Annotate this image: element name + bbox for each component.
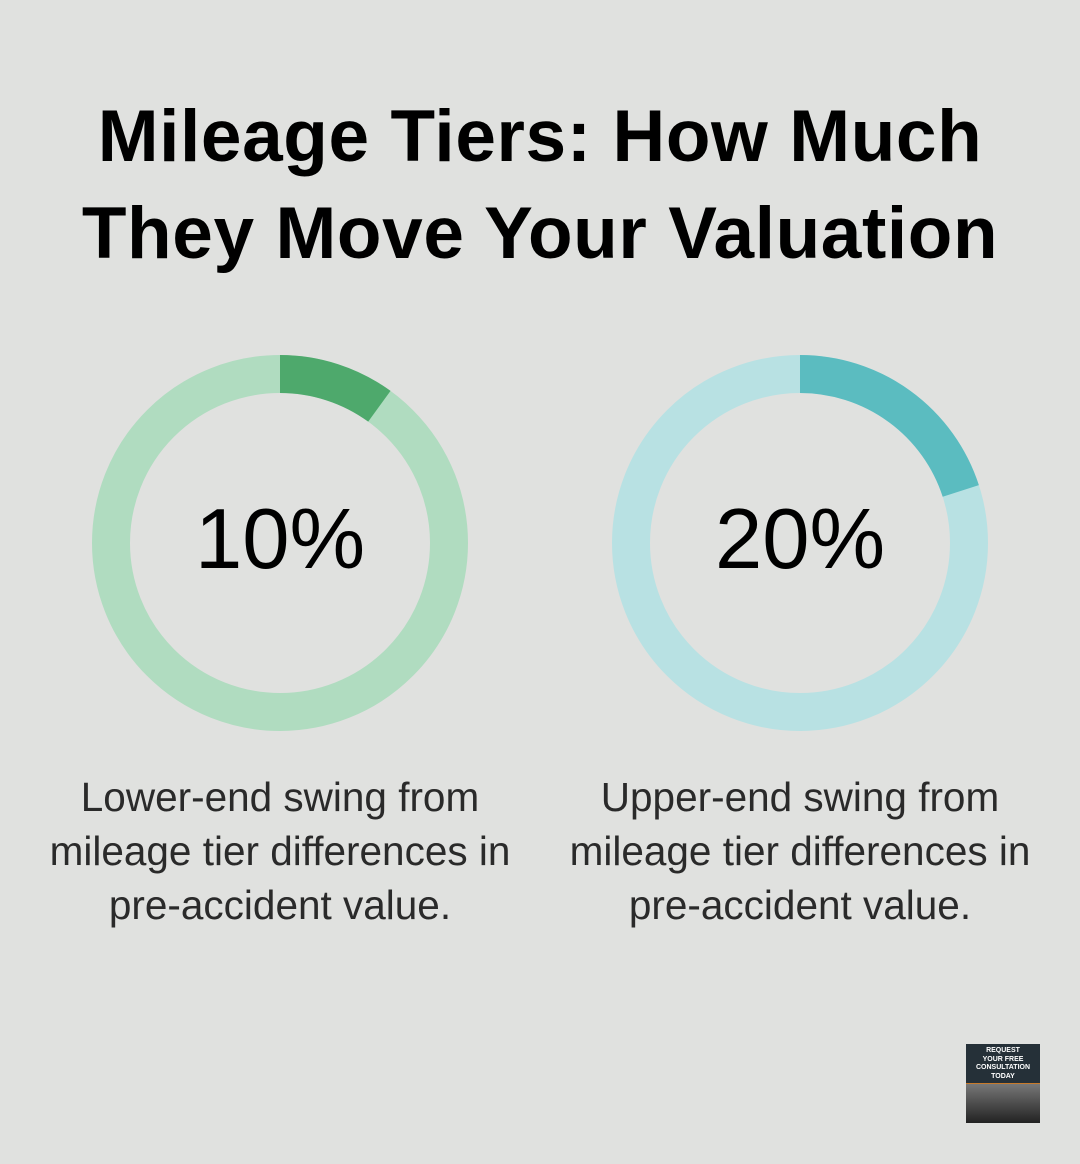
caption left xyxy=(50,774,510,928)
logo badge xyxy=(966,1044,1040,1123)
caption right: Upper-end swing from xyxy=(601,774,999,820)
value: 20%: 20% xyxy=(715,492,885,587)
caption right xyxy=(570,774,1030,928)
value: 10%: 10% xyxy=(195,492,365,587)
caption left: mileage tier differences in xyxy=(50,828,510,874)
title: Mileage Tiers: How Much xyxy=(98,96,982,177)
caption left: Lower-end swing from xyxy=(81,774,479,820)
logo badge: CONSULTATION xyxy=(976,1064,1030,1071)
caption right: mileage tier differences in xyxy=(570,828,1030,874)
logo badge: REQUEST xyxy=(986,1047,1020,1054)
caption left: pre-accident value. xyxy=(109,882,451,928)
logo badge: YOUR FREE xyxy=(983,1056,1023,1062)
donut: 10% xyxy=(92,355,468,731)
logo badge: TODAY xyxy=(991,1072,1015,1080)
title: They Move Your Valuation xyxy=(82,193,998,274)
title xyxy=(82,96,998,274)
donut: 20% xyxy=(612,355,988,731)
caption right: pre-accident value. xyxy=(629,882,971,928)
